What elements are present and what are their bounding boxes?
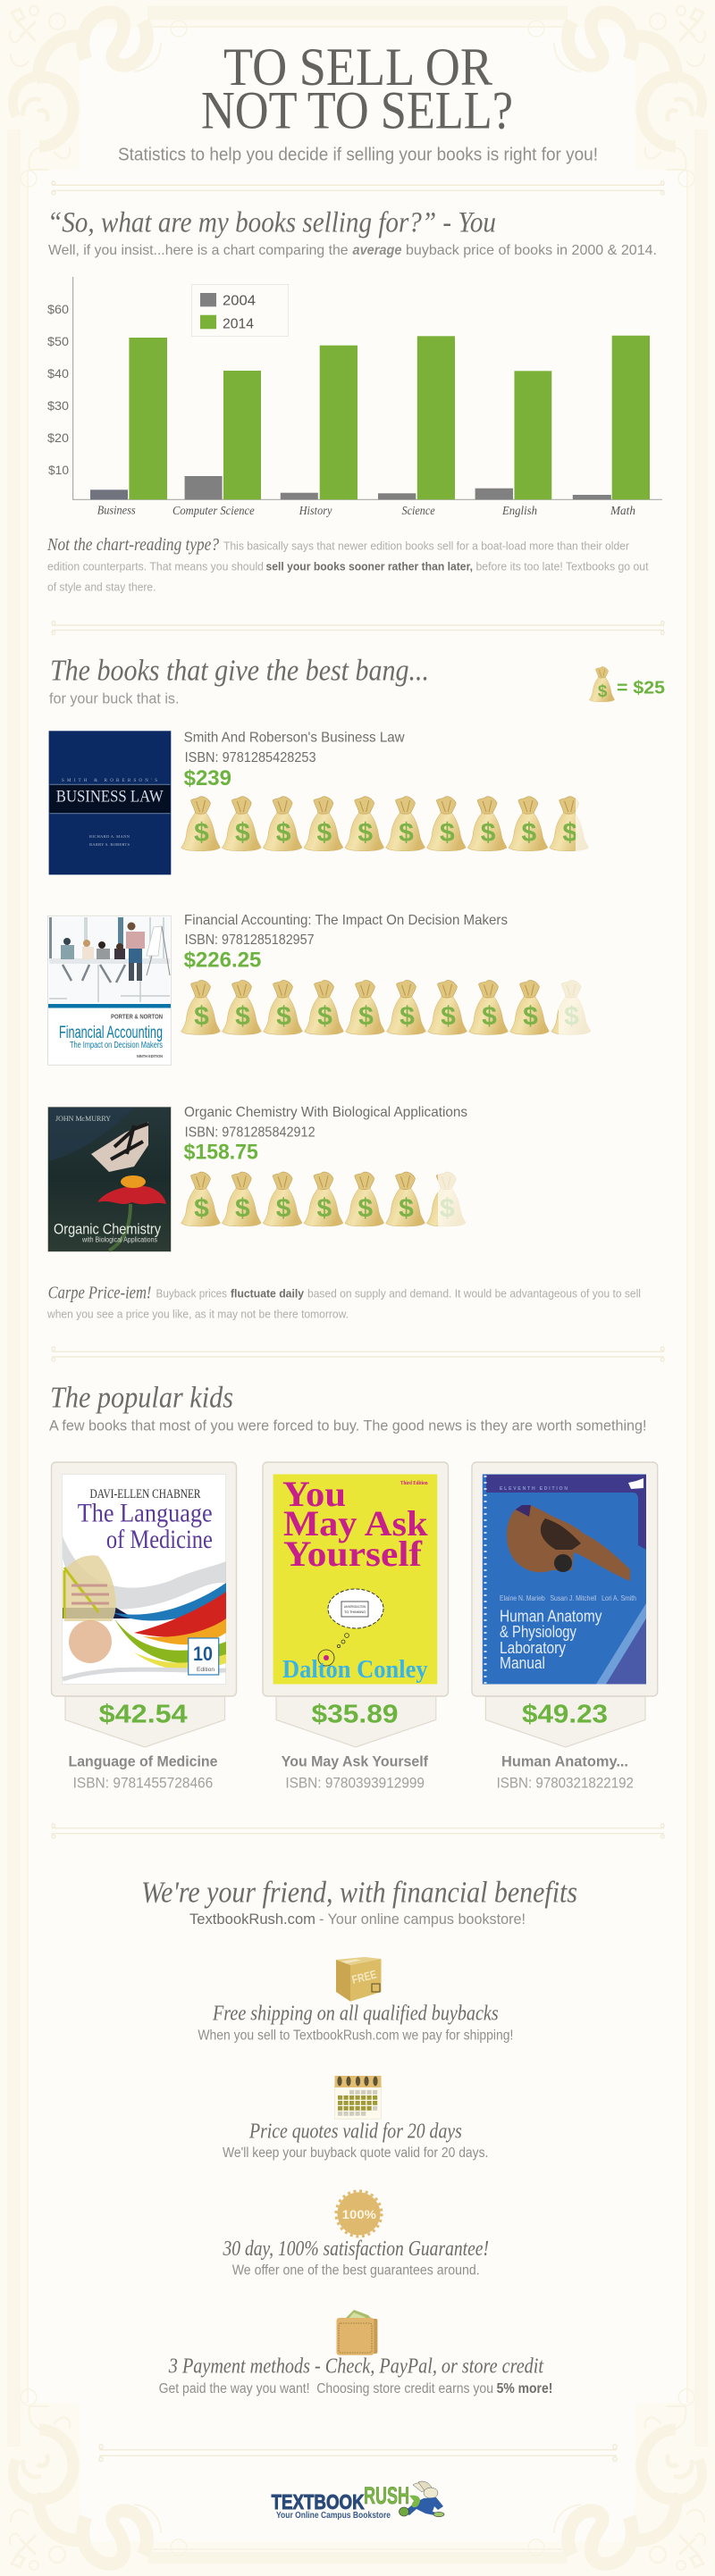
section heading: the popular kids: A few books that most of you were forced to buy. The good news is they are worth something!: [49, 1418, 647, 1434]
money bags: 9.6: $: [399, 818, 414, 848]
benefit: free shipping: [198, 1957, 513, 2043]
title: [201, 38, 513, 139]
y axis labels: $60: [47, 302, 69, 316]
money bags: 6.35: $: [399, 1193, 414, 1223]
y axis labels: $40: [47, 366, 69, 381]
book 3: Organic Chemistry: $158.75: [184, 1140, 258, 1164]
book 3: Organic Chemistry: Organic Chemistry With Biological Applications: [184, 1105, 467, 1120]
category labels: History: [299, 505, 332, 518]
benefit: payment methods: 3 Payment methods - Check, PayPal, or store credit: [168, 2355, 544, 2379]
icon: shipping box: [336, 1957, 381, 2002]
text block: Carpe Price-iem: fluctuate daily: [231, 1288, 304, 1301]
bars: 2014: [129, 336, 650, 499]
cover: You May Ask Yourself: May Ask: [283, 1503, 428, 1543]
section heading: what are my books selling for: “So, what are my books selling for?” - You: [47, 206, 496, 238]
category labels: [97, 504, 635, 518]
icon: 100% badge: [336, 2191, 382, 2237]
y axis labels: $50: [47, 334, 69, 348]
text block: Carpe Price-iem: based on supply and demand. It would be advantageous of you to sell: [307, 1288, 641, 1301]
cover: The Language of Medicine: The Language: [78, 1498, 213, 1527]
book 3: Organic Chemistry: [48, 1105, 467, 1251]
book 3: Organic Chemistry: ISBN: 9781285842912: [185, 1125, 315, 1140]
category labels: Math: [610, 505, 635, 518]
money bags: 9.6: $: [522, 818, 537, 848]
cover: Business Law: SMITH & ROBERSON'S: [62, 779, 157, 783]
cover: Business Law: BARRY S. ROBERTS: [89, 842, 130, 847]
cover: You May Ask Yourself: Dalton Conley: [282, 1656, 428, 1684]
subtitle: Statistics to help you decide if selling your books is right for you!: [118, 145, 598, 164]
cover: Financial Accounting: The Impact on Decision Makers: [70, 1041, 163, 1050]
legend: one bag equals $25: = $25: [617, 679, 665, 698]
text block: Carpe Price-iem: Carpe Price-iem!: [48, 1283, 151, 1302]
book 2: Financial Accounting: [48, 913, 593, 1065]
benefit: price quotes valid: Price quotes valid for 20 days: [248, 2120, 462, 2143]
icon: running rabbit mascot: [399, 2481, 444, 2517]
cover: Human Anatomy and Physiology Laboratory Manual: & Physiology: [500, 1623, 576, 1641]
cover: Human Anatomy and Physiology Laboratory Manual: Manual: [500, 1654, 545, 1672]
money bags: 9.1: $: [276, 1002, 291, 1032]
money bags: 9.1: $: [564, 1002, 579, 1032]
money bags: 9.6: $: [440, 818, 455, 848]
money bags: 9.1: $: [523, 1002, 538, 1032]
logo: TextbookRush: [272, 2481, 444, 2521]
cover: Human Anatomy and Physiology Laboratory Manual: [483, 1474, 646, 1685]
section heading: the popular kids: [49, 1381, 647, 1434]
money bags: 6.35: $: [317, 1193, 332, 1223]
card: Language of Medicine: Language of Medicine: [68, 1753, 218, 1770]
benefit: satisfaction guarantee: 30 day, 100% satisfaction Guarantee!: [223, 2237, 489, 2261]
benefit: price quotes valid: We'll keep your buyback quote valid for 20 days.: [223, 2145, 488, 2161]
money bags: 9.1: $: [482, 1002, 497, 1032]
money bags: 9.1: $: [400, 1002, 415, 1032]
card: Human Anatomy: [472, 1462, 658, 1792]
benefit: satisfaction guarantee: [223, 2191, 489, 2279]
icon: wallet: [336, 2310, 377, 2355]
money bags: 9.1: [181, 978, 593, 1036]
money bags: 6.35: $: [194, 1193, 209, 1223]
title: TO SELL OR: [223, 38, 492, 96]
book 1: Business Law: [49, 731, 590, 874]
legend: one bag equals $25: [589, 666, 665, 702]
card: Language of Medicine: $42.54: [99, 1701, 188, 1729]
section heading: best bang for your buck: for your buck that is.: [49, 690, 179, 707]
book 2: Financial Accounting: Financial Accounting: The Impact On Decision Makers: [184, 913, 508, 928]
money bags: 6.35: $: [440, 1193, 455, 1223]
money bags: 9.6: $: [194, 818, 209, 848]
section heading: financial benefits: [141, 1876, 577, 1928]
money bags: 9.1: $: [358, 1002, 374, 1032]
cover: Organic Chemistry: [48, 1107, 171, 1251]
cover: You May Ask Yourself: TO THINKING: [344, 1610, 366, 1614]
logo: TextbookRush: Your Online Campus Bookstore: [276, 2511, 391, 2521]
money bags: 9.6: $: [235, 818, 250, 848]
chart explanation text: This basically says that newer edition books sell for a boat-load more than their older: [223, 540, 629, 553]
category labels: Computer Science: [172, 505, 255, 518]
category labels: Business: [97, 504, 136, 517]
chart explanation text: Not the chart-reading type?: [46, 535, 219, 555]
money bags: 9.6: $: [481, 818, 496, 848]
card: You May Ask Yourself: $35.89: [311, 1701, 399, 1729]
cover: Business Law: RICHARD A. MANN: [89, 834, 130, 839]
money bags: 9.1: $: [317, 1002, 332, 1032]
benefit: price quotes valid: [223, 2076, 488, 2161]
logo: TextbookRush: RUSH: [364, 2482, 409, 2509]
money bags: 6.35: $: [235, 1193, 250, 1223]
book 2: Financial Accounting: $226.25: [184, 949, 261, 973]
chart explanation text: before its too late! Textbooks go out: [475, 561, 649, 573]
cover: Financial Accounting: PORTER & NORTON: [111, 1015, 163, 1021]
cover: Financial Accounting: Financial Accounting: [59, 1024, 163, 1042]
money bags: 6.35: $: [358, 1193, 373, 1223]
section heading: best bang for your buck: The books that give the best bang...: [50, 655, 429, 688]
money bags: 9.6: $: [562, 818, 577, 848]
cover: The Language of Medicine: of Medicine: [106, 1525, 213, 1554]
book 1: Business Law: Smith And Roberson's Business Law: [184, 731, 405, 746]
cover: Organic Chemistry: with Biological Applications: [81, 1236, 157, 1244]
card: You May Ask Yourself: [263, 1462, 449, 1792]
category labels: English: [501, 505, 537, 518]
chart explanation text: edition counterparts. That means you should: [47, 561, 264, 573]
money bags: 6.35: $: [276, 1193, 291, 1223]
section heading: what are my books selling for: Well, if you insist...here is a chart comparing the: [48, 243, 352, 258]
bars: 2004: [90, 476, 611, 499]
category labels: Science: [402, 505, 435, 518]
benefit: free shipping: Free shipping on all qualified buybacks: [212, 2002, 499, 2025]
logo: TextbookRush: TEXTBOOK: [272, 2490, 365, 2513]
book 2: Financial Accounting: ISBN: 9781285182957: [185, 933, 315, 948]
text block: Carpe Price-iem: Buyback prices: [156, 1288, 227, 1301]
cover: Human Anatomy and Physiology Laboratory Manual: Human Anatomy: [500, 1608, 602, 1626]
cover: You May Ask Yourself: AN INTRODUCTION: [344, 1604, 366, 1609]
legend: 2014: [223, 317, 254, 332]
card: Human Anatomy: ISBN: 9780321822192: [497, 1775, 634, 1792]
chart explanation text: sell your books sooner rather than later,: [266, 561, 473, 573]
cover: You May Ask Yourself: [273, 1474, 437, 1685]
cover: Business Law: [49, 731, 171, 874]
title: NOT TO SELL?: [201, 80, 513, 139]
money bags: 9.1: $: [235, 1002, 250, 1032]
cover: You May Ask Yourself: Yourself: [283, 1534, 423, 1574]
legend: one bag equals $25: $: [598, 682, 608, 701]
cover: The Language of Medicine: Edition: [197, 1668, 214, 1673]
legend: [191, 284, 288, 336]
cover: The Language of Medicine: 10: [193, 1643, 213, 1665]
cover: The Language of Medicine: [62, 1474, 226, 1685]
cover: Human Anatomy and Physiology Laboratory Manual: ELEVENTH EDITION: [500, 1486, 568, 1492]
cover: Organic Chemistry: Organic Chemistry: [54, 1221, 161, 1238]
cover: You May Ask Yourself: Third Edition: [400, 1481, 428, 1486]
section heading: financial benefits: We're your friend, with financial benefits: [141, 1876, 577, 1909]
section heading: best bang for your buck: [49, 655, 429, 707]
cover: Human Anatomy and Physiology Laboratory Manual: Laboratory: [500, 1639, 566, 1657]
card: You May Ask Yourself: You May Ask Yourself: [282, 1753, 428, 1770]
cover: Human Anatomy and Physiology Laboratory Manual: Elaine N. Marieb Susan J. Mitchell Lori A. Smith: [500, 1594, 636, 1602]
chart explanation text: [46, 535, 649, 594]
benefit: payment methods: [159, 2310, 552, 2396]
card: You May Ask Yourself: ISBN: 9780393912999: [285, 1775, 425, 1792]
benefit: payment methods: Get paid the way you want! Choosing store credit earns you: [159, 2381, 493, 2396]
card: Language of Medicine: [52, 1462, 236, 1792]
section heading: what are my books selling for: [47, 206, 657, 258]
card: Human Anatomy: $49.23: [522, 1701, 608, 1729]
book 1: Business Law: $239: [184, 766, 231, 790]
legend: 2004: [223, 293, 256, 308]
text block: Carpe Price-iem: [46, 1283, 641, 1321]
section heading: financial benefits: TextbookRush.com: [189, 1911, 315, 1928]
cover: Organic Chemistry: JOHN McMURRY: [55, 1115, 111, 1123]
chart explanation text: of style and stay there.: [47, 581, 156, 594]
section heading: financial benefits: - Your online campus bookstore!: [319, 1911, 526, 1928]
money bags: 9.6: $: [276, 818, 291, 848]
money bags: 9.6: [181, 795, 590, 852]
cover: You May Ask Yourself: You: [282, 1474, 346, 1514]
cover: Financial Accounting: NINTH EDITION: [137, 1054, 163, 1058]
icon: shipping box: FREE: [350, 1968, 378, 1986]
money bags: 9.1: $: [441, 1002, 456, 1032]
benefit: payment methods: 5% more!: [497, 2381, 552, 2396]
money bags: 6.35: [181, 1170, 467, 1228]
cover: The Language of Medicine: DAVI-ELLEN CHABNER: [89, 1487, 200, 1501]
card: Language of Medicine: ISBN: 9781455728466: [73, 1775, 213, 1792]
cover: Business Law: BUSINESS LAW: [56, 787, 164, 806]
cover: Financial Accounting: [48, 916, 171, 1065]
money bags: 9.1: $: [194, 1002, 209, 1032]
y axis labels: $20: [47, 431, 69, 445]
section heading: the popular kids: The popular kids: [50, 1381, 233, 1414]
text block: Carpe Price-iem: when you see a price you like, as it may not be there tomorrow.: [46, 1309, 349, 1321]
y axis labels: $10: [48, 463, 69, 477]
money bags: 9.6: $: [358, 818, 373, 848]
money bags: 9.6: $: [317, 818, 332, 848]
y axis labels: $30: [47, 398, 69, 413]
benefit: free shipping: When you sell to TextbookRush.com we pay for shipping!: [198, 2028, 513, 2043]
card: Human Anatomy: Human Anatomy...: [501, 1753, 628, 1770]
icon: calendar: [334, 2076, 381, 2119]
y axis labels: [47, 302, 69, 477]
benefit: satisfaction guarantee: We offer one of the best guarantees around.: [232, 2263, 480, 2279]
book 1: Business Law: ISBN: 9781285428253: [185, 750, 316, 765]
section heading: what are my books selling for: average: [352, 243, 402, 258]
section heading: what are my books selling for: buyback price of books in 2000 & 2014.: [406, 243, 657, 258]
bar chart: average buyback price: [47, 277, 662, 518]
icon: 100% badge: 100%: [342, 2207, 377, 2221]
